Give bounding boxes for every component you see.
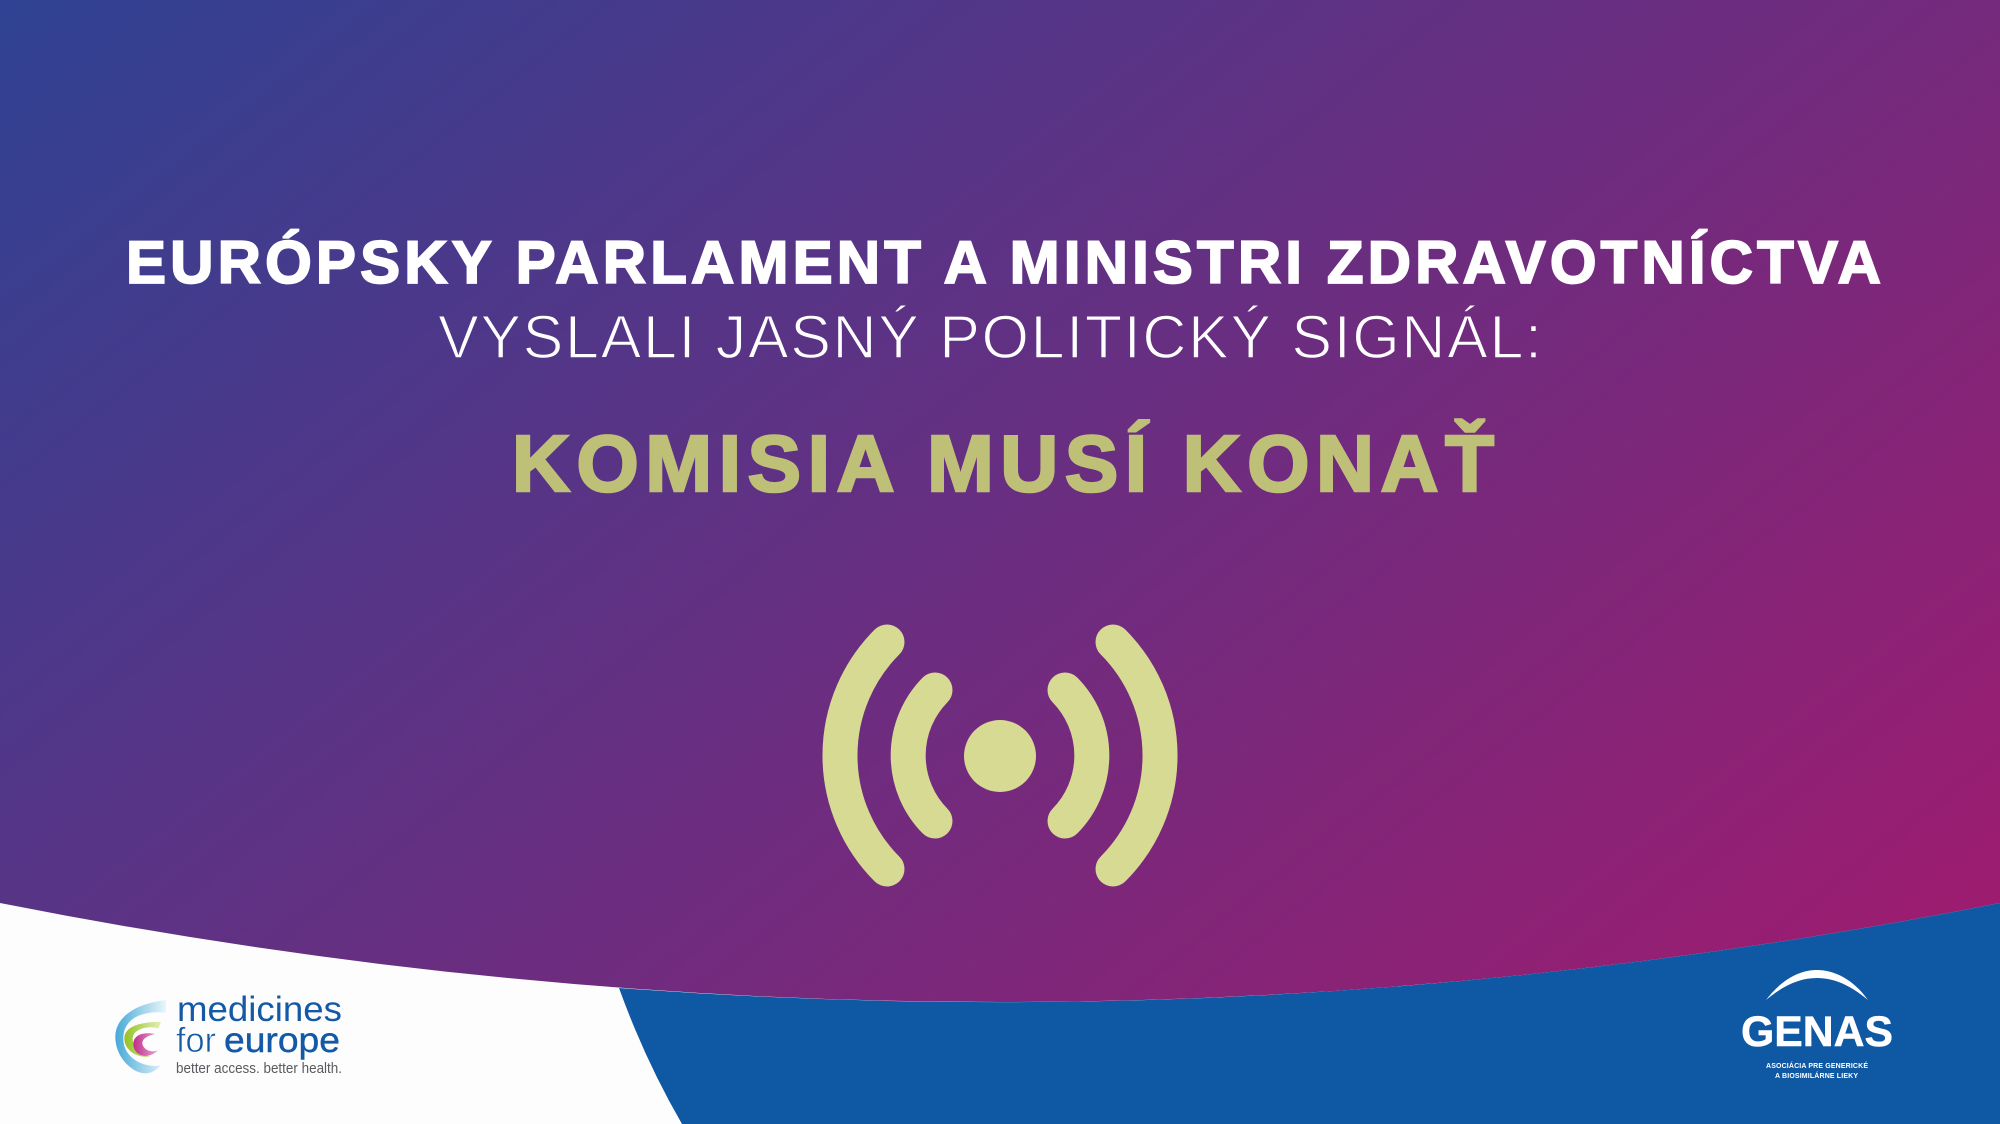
wordmark: GENAS: GENAS xyxy=(1741,1008,1893,1056)
blue curved footer panel xyxy=(619,903,2000,1124)
logo: medicines for europe xyxy=(115,990,342,1077)
heading line 1: EURÓPSKY PARLAMENT A MINISTRI ZDRAVOTNÍCTVA xyxy=(126,229,1881,296)
icon: medicines for europe rings xyxy=(115,1000,166,1073)
heading line 3: KOMISIA MUSÍ KONAŤ xyxy=(512,419,1494,508)
wordmark: medicines: medicines xyxy=(177,990,342,1029)
tagline line 2: A BIOSIMILÁRNE LIEKY xyxy=(1775,1071,1858,1080)
white curved footer xyxy=(0,903,2000,1124)
icon: broadcast signal xyxy=(840,642,1160,869)
tagline line 1: ASOCIÁCIA PRE GENERICKÉ xyxy=(1766,1061,1868,1070)
logo: GENAS xyxy=(1741,970,1893,1080)
wordmark: europe: europe xyxy=(224,1021,340,1060)
tagline: better access. better health. xyxy=(176,1060,342,1077)
icon: GENAS arc xyxy=(1766,970,1868,1000)
wordmark: for: for xyxy=(176,1021,216,1060)
heading line 2: VYSLALI JASNÝ POLITICKÝ SIGNÁL: xyxy=(438,303,1542,371)
